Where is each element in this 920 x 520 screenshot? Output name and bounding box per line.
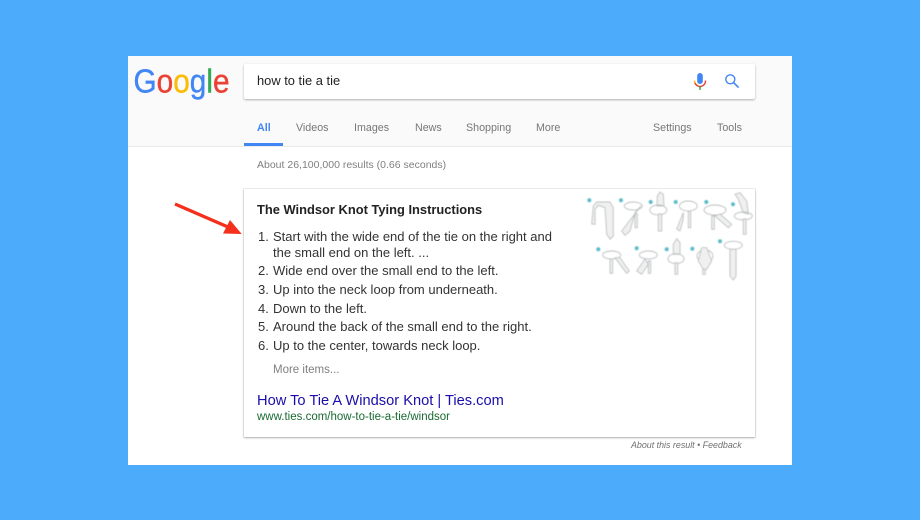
panel: featured snippet card xyxy=(244,189,755,437)
icon: microphone xyxy=(694,73,706,90)
active tab underline xyxy=(244,143,283,146)
footer note: About this result • Feedback xyxy=(631,440,742,450)
illustration: tie knot steps xyxy=(586,191,754,281)
snippet heading: The Windsor Knot Tying Instructions xyxy=(257,202,482,217)
tab: Shopping: Shopping xyxy=(466,122,511,134)
tab: Videos: Videos xyxy=(296,122,328,134)
tab: Settings: Settings xyxy=(653,122,692,134)
tab: Images: Images xyxy=(354,122,389,134)
step 6: 6. xyxy=(258,338,269,353)
search query: how to tie a tie xyxy=(257,73,340,88)
step 6: Up to the center, towards neck loop. xyxy=(273,338,480,353)
result title link: How To Tie A Windsor Knot | Ties.com xyxy=(257,393,504,409)
instruction list xyxy=(258,229,552,353)
step 4: 4. xyxy=(258,301,269,316)
step 2: Wide end over the small end to the left. xyxy=(273,263,498,278)
tab: More: More xyxy=(536,122,560,134)
search box xyxy=(244,64,755,99)
step 5: Around the back of the small end to the right. xyxy=(273,319,532,334)
step 3: Up into the neck loop from underneath. xyxy=(273,282,498,297)
tab: Tools: Tools xyxy=(717,122,742,134)
results count: About 26,100,000 results (0.66 seconds) xyxy=(257,159,446,171)
navigation tabs xyxy=(244,122,742,146)
step 1 xyxy=(258,229,552,260)
step 3: 3. xyxy=(258,282,269,297)
tab: All: All xyxy=(257,122,271,134)
icon: magnifier xyxy=(725,74,740,88)
panel: search results page xyxy=(128,56,792,465)
step 1: the small end on the left. ... xyxy=(273,245,429,260)
logo: Google: Google xyxy=(134,62,230,100)
step 2: 2. xyxy=(258,263,269,278)
step 1: 1. xyxy=(258,229,269,244)
more items link: More items... xyxy=(273,364,339,376)
step 5: 5. xyxy=(258,319,269,334)
step 1: Start with the wide end of the tie on the right and xyxy=(273,229,552,244)
result url: www.ties.com/how-to-tie-a-tie/windsor xyxy=(257,411,450,423)
tab: News: News xyxy=(415,122,442,134)
step 4: Down to the left. xyxy=(273,301,367,316)
arrow: red pointer to list xyxy=(174,202,242,234)
search header band xyxy=(128,56,792,147)
